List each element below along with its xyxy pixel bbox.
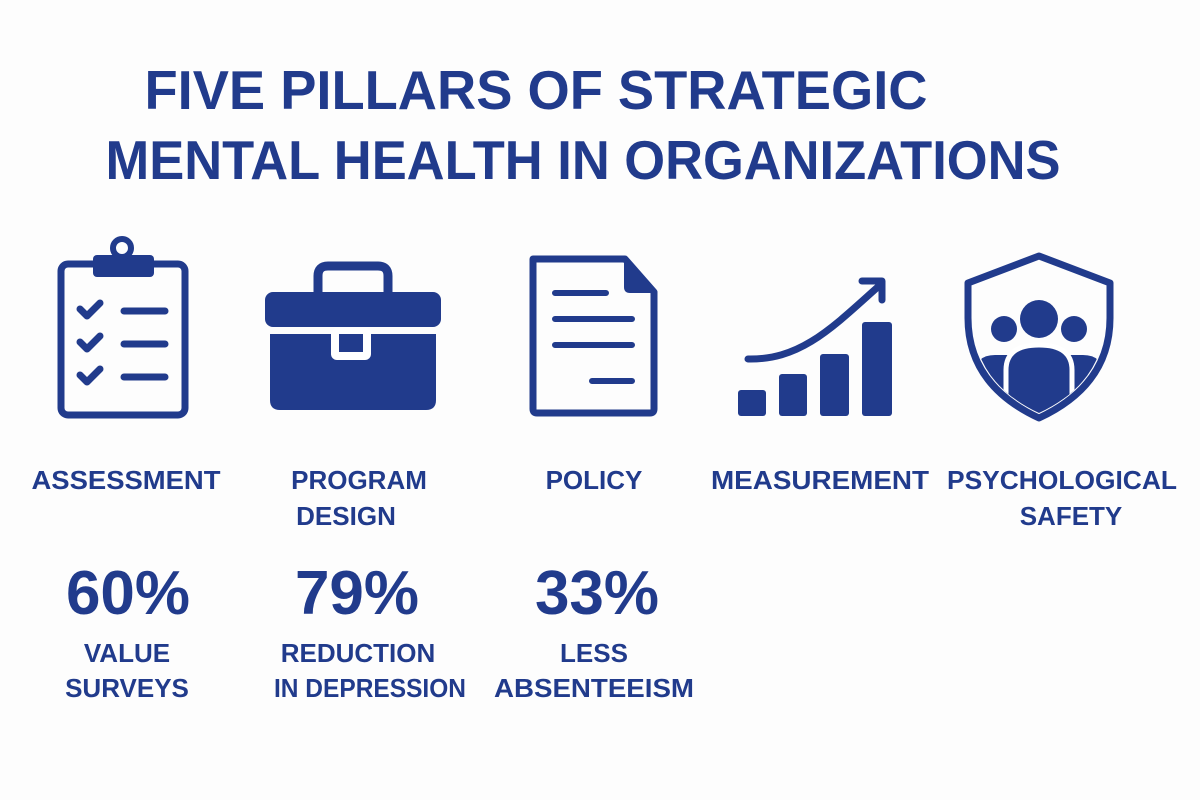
label: policy: POLICY: [546, 465, 642, 495]
title: MENTAL HEALTH IN ORGANIZATIONS: [106, 129, 1060, 191]
label: psychological safety: PSYCHOLOGICAL: [947, 465, 1177, 495]
stat: 33%: [494, 559, 694, 703]
stat: 60%: SURVEYS: [65, 673, 189, 703]
icon: shield with people: [968, 256, 1110, 420]
title: FIVE PILLARS OF STRATEGIC: [144, 59, 928, 121]
stat: 33%: 33%: [535, 559, 659, 628]
stat: 33%: LESS: [560, 638, 628, 668]
stat: 79%: 79%: [295, 559, 419, 628]
label: psychological safety: SAFETY: [1020, 501, 1122, 531]
stat: 79%: [274, 559, 466, 703]
label: psychological safety: [947, 465, 1177, 531]
stat: 60%: 60%: [66, 559, 190, 628]
icon: growth chart: [738, 281, 892, 416]
icon: document: [533, 258, 656, 413]
label: program design: DESIGN: [296, 501, 396, 531]
label: program design: [291, 465, 427, 531]
icon: clipboard: [61, 239, 185, 415]
stat: 79%: REDUCTION: [281, 638, 435, 668]
icon: briefcase: [265, 266, 441, 410]
stat: 33%: ABSENTEEISM: [494, 673, 694, 703]
label: assessment: ASSESSMENT: [32, 465, 221, 495]
title: [106, 59, 1060, 191]
label: measurement: MEASUREMENT: [711, 465, 929, 495]
stat: 60%: VALUE: [84, 638, 170, 668]
stat: 79%: IN DEPRESSION: [274, 673, 466, 703]
stat: 60%: [65, 559, 190, 703]
label: program design: PROGRAM: [291, 465, 427, 495]
